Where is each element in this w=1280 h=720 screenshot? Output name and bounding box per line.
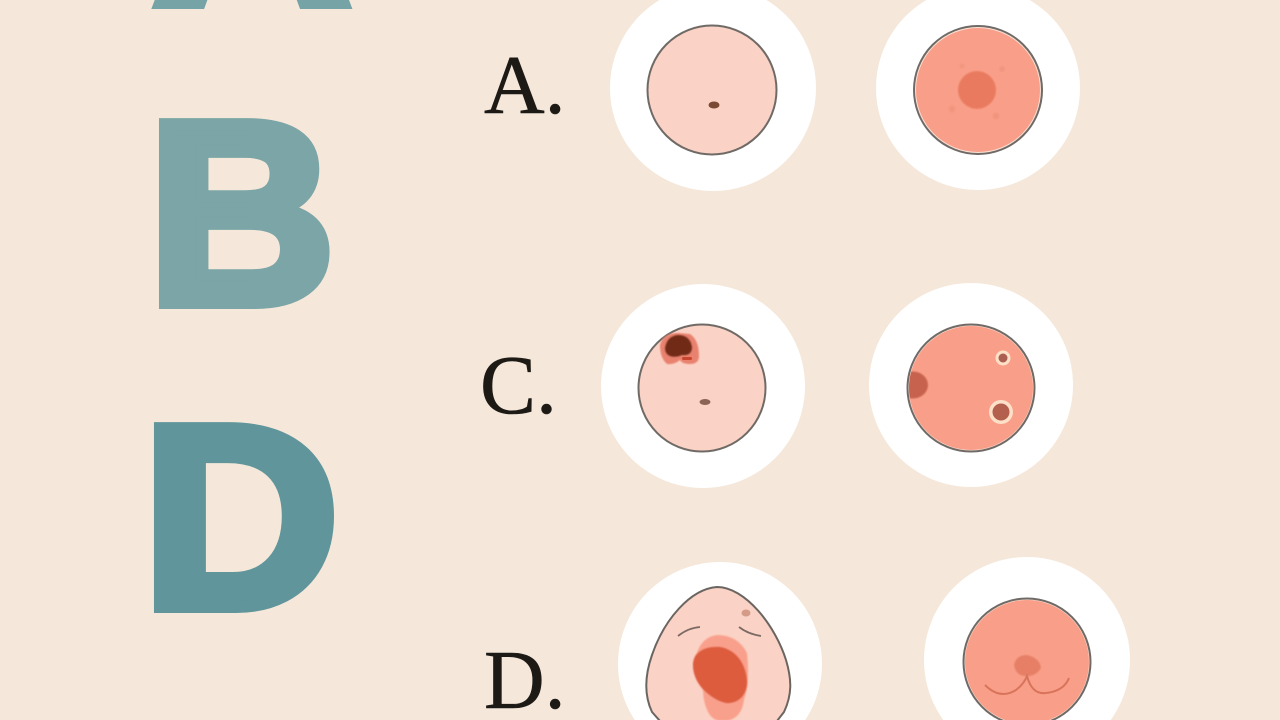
large letter B: B bbox=[148, 69, 335, 359]
illustration: option C lesion with dark spot bbox=[601, 284, 805, 488]
label C.: C. bbox=[480, 339, 557, 432]
large letter D: D bbox=[142, 373, 339, 663]
illustration: option A normal skin bbox=[610, 0, 816, 191]
illustration: option C lesions on red skin bbox=[869, 283, 1073, 487]
label A.: A. bbox=[484, 39, 566, 132]
illustration: option D red skin with curved lines bbox=[924, 557, 1130, 720]
illustration: option D egg-shaped ulcer bbox=[618, 562, 822, 720]
infographic canvas bbox=[151, 0, 1130, 720]
illustration: option A inflamed skin bbox=[876, 0, 1080, 190]
